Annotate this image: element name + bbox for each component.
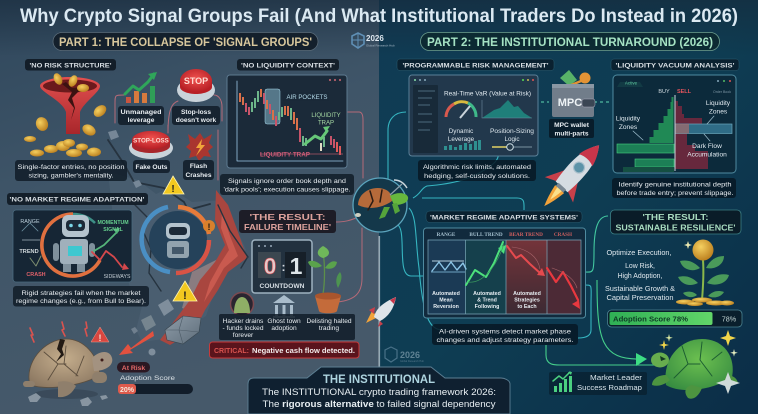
text: failure timeline outcomes: forever <box>233 332 254 339</box>
panel: regime adaptive chart <box>424 228 586 318</box>
panel: regime adaptive chart: Automated <box>432 291 460 297</box>
label: at risk <box>117 362 150 372</box>
panel: market regime robot: SIDEWAYS <box>104 274 131 280</box>
panel: market regime robot: MOMENTUM <box>97 220 129 226</box>
panel: risk dashboard: Position-Sizing <box>490 128 535 135</box>
text: liquidity description <box>220 174 354 195</box>
panel: market regime robot: RANGE <box>20 219 40 225</box>
rocks: rubble <box>108 130 201 356</box>
logo: 2026 top <box>352 33 395 48</box>
panel: regime adaptive chart: Mean <box>439 298 453 304</box>
icon: MPC wallet with key <box>552 70 595 117</box>
label: liquidity vacuum analysis <box>611 59 739 70</box>
text: adoption score label: Adoption Score <box>120 375 175 382</box>
text: liquidity vacuum description <box>612 178 736 198</box>
label: no market regime adaptation <box>7 193 148 205</box>
panel: liquidity depth chart: Liquidity <box>706 100 731 107</box>
icon: healthy green turtle <box>651 330 740 399</box>
icon: second robot in ring: ! <box>208 222 210 232</box>
panel: regime adaptive chart: Automated <box>513 291 541 297</box>
arrow: to market leader turtle <box>636 353 647 366</box>
slider <box>492 144 532 150</box>
logo: 2026 watermark <box>385 347 425 363</box>
text: market leader roadmap with growth icon: Market Leader <box>590 375 643 382</box>
icon: MPC wallet with key: MPC <box>558 97 582 109</box>
label: no liquidity context: 'NO LIQUIDITY CONTEXT' <box>241 62 335 70</box>
panel: liquidity depth chart: BUY <box>658 89 670 95</box>
candles <box>239 89 341 155</box>
text: risk description: hedging, self-custody solutions. <box>424 173 530 180</box>
icon: growth chart roadmap <box>553 372 572 392</box>
text: resilience benefits: Low Risk, <box>625 263 655 270</box>
panel: regime adaptive chart: Following <box>475 304 499 310</box>
arrow: red down-left <box>119 331 154 355</box>
heading: sustainable resilience <box>610 210 741 234</box>
text: failure timeline outcomes: - funds locked <box>222 325 264 332</box>
text: no risk description <box>15 160 127 181</box>
heading: failure timeline: FAILURE TIMELINE' <box>244 223 331 232</box>
text: flash crashes: Crashes <box>185 172 212 179</box>
icon: rising bars and arrow <box>125 72 157 103</box>
heading: sustainable resilience: SUSTAINABLE RESILIENCE' <box>616 224 736 232</box>
text: stop-loss doesn't work: Stop-loss <box>181 109 211 116</box>
panel: liquidity depth chart <box>613 75 736 173</box>
panel: regime adaptive chart: & Trend <box>477 298 497 304</box>
leverage bars <box>444 140 481 150</box>
panel: regime adaptive chart: Automated <box>473 291 501 297</box>
panel: risk dashboard: Real-Time VaR (Value at Risk) <box>444 90 531 98</box>
text: resilience benefits: Optimize Execution, <box>606 250 672 257</box>
icon: flash crash burst <box>186 133 213 161</box>
icon: bank building <box>273 295 295 318</box>
callout: critical alert: CRITICAL: <box>214 346 249 355</box>
panel: countdown timer <box>252 240 312 293</box>
icon: second robot in ring <box>142 207 215 273</box>
panel: countdown timer: 1 <box>290 253 303 279</box>
text: resilience benefits: High Adoption, <box>618 273 662 280</box>
background: right institutional side <box>379 0 758 414</box>
text: MPC wallet caption: MPC wallet <box>554 122 590 129</box>
icon: small rocket <box>366 297 396 327</box>
text: unmanaged leverage: leverage <box>128 117 155 124</box>
text: regime adaptive description <box>432 324 578 345</box>
panel: risk dashboard: Dynamic <box>449 128 473 135</box>
panel: regime adaptive chart: Strategies <box>514 298 540 304</box>
panel: liquidity depth chart: Liquidity <box>616 116 641 122</box>
text: market leader roadmap with growth icon: Success Roadmap <box>577 385 642 392</box>
panel: liquidity depth chart: Active <box>625 80 638 86</box>
text: MPC wallet caption <box>549 119 594 138</box>
chart: adoption progress 78%: 78% <box>722 314 737 324</box>
chart: candlesticks with air pockets: TRAP <box>318 120 334 126</box>
panel: countdown timer: COUNTDOWN <box>260 283 305 290</box>
VaR area chart <box>482 100 532 118</box>
text: fake outs <box>133 160 170 173</box>
label: no market regime adaptation: 'NO MARKET REGIME ADAPTATION' <box>10 196 145 204</box>
icon: warning triangle upper <box>163 176 184 195</box>
divider: vertical white line <box>378 236 380 368</box>
chart: adoption progress 20% <box>118 384 193 394</box>
text: flash crashes: Flash <box>190 163 207 170</box>
icon: warning triangle upper: ! <box>171 184 175 195</box>
chart: adoption progress 78% <box>608 310 742 327</box>
label: market regime adaptive systems: 'MARKET REGIME ADAPTIVE SYSTEMS' <box>430 214 578 222</box>
panel: liquidity depth chart: Accumulation <box>687 152 727 158</box>
robot figure <box>53 215 95 272</box>
icon: warning triangle lower <box>173 281 197 302</box>
panel: liquidity depth chart: SELL <box>677 89 692 95</box>
text: regime description <box>13 286 149 306</box>
chart: candlesticks with air pockets: LIQUIDITY TRAP <box>260 152 310 158</box>
icon: hacker <box>230 292 254 316</box>
icon: warning triangle lower: ! <box>183 290 187 302</box>
icon: central turtle with pickaxe <box>353 178 408 232</box>
text: stop-loss doesn't work: doesn't work <box>176 117 217 124</box>
text: liquidity vacuum description: Identify genuine institutional depth <box>618 182 732 188</box>
text: failure timeline outcomes: Delisting halted <box>306 318 352 325</box>
central crack: torn divide <box>108 140 248 345</box>
panel: market regime robot: CRASH <box>26 272 46 278</box>
panel: regime adaptive chart: CRASH <box>554 232 572 238</box>
chart: candlesticks with air pockets: LIQUIDITY <box>311 113 341 119</box>
chart: adoption progress 20%: 20% <box>120 387 135 394</box>
label: no risk structure: 'NO RISK STRUCTURE' <box>30 62 112 70</box>
label: at risk: At Risk <box>122 365 145 372</box>
panel: regime adaptive chart: BULL TREND <box>469 232 503 238</box>
text: failure timeline outcomes: Hacker drains <box>223 318 264 325</box>
text: liquidity vacuum description: before trade entry; prevent slippage. <box>616 190 734 197</box>
connectors: right panel links <box>388 102 660 365</box>
icon: stop button: STOP <box>184 76 208 86</box>
text: unmanaged leverage: Unmanaged <box>120 109 162 116</box>
panel: institutional bottom banner: The INSTITUTIONAL crypto trading framework 2026: <box>262 387 496 397</box>
gauge <box>446 102 476 118</box>
text: liquidity description: Signals ignore order book depth and <box>228 178 346 185</box>
text: resilience benefits: Capital Preservation <box>606 295 674 302</box>
heading: sustainable resilience: 'THE RESULT: <box>642 213 708 222</box>
dots: window controls <box>329 79 341 81</box>
panel: risk dashboard: Leverage <box>448 136 475 143</box>
text: resilience benefits: Sustainable Growth & <box>605 286 675 293</box>
icon: stop-loss button <box>129 131 173 159</box>
text: regime adaptive description: changes and adjust strategy parameters. <box>436 337 574 344</box>
text: MPC wallet caption: multi-parts <box>554 130 589 138</box>
label: no liquidity context <box>237 59 339 70</box>
chart: candlesticks with air pockets: AIR POCKETS <box>286 94 328 101</box>
text: liquidity description: 'dark pools'; execution causes slippage. <box>224 186 351 194</box>
label: programmable risk management: 'PROGRAMMABLE RISK MANAGEMENT' <box>402 62 549 70</box>
text: no risk description: sizing, gambler's mentality. <box>28 172 114 180</box>
background: title shading <box>0 0 758 56</box>
icon: rocket <box>530 133 613 219</box>
icon: wilting plant in pot <box>308 246 341 313</box>
text: flash crashes <box>183 160 214 180</box>
logo: 2026 top: Global Research Hub <box>366 44 395 48</box>
buy depth <box>650 97 674 143</box>
panel: market regime robot: TREND <box>19 249 39 255</box>
panel: liquidity depth chart: Order Book <box>713 90 731 94</box>
icon: cracked turtle <box>23 322 112 406</box>
icon: stop-loss button: STOP-LOSS <box>133 138 169 144</box>
heading: part 1: PART 1: THE COLLAPSE OF 'SIGNAL GROUPS' <box>59 35 312 49</box>
panel: regime adaptive chart: BEAR TREND <box>509 232 543 238</box>
panel: institutional bottom banner: The rigorous alternative to failed signal dependency <box>262 399 496 409</box>
buy zones <box>617 144 674 153</box>
panel: liquidity depth chart: Dark Flow <box>692 143 722 150</box>
label: liquidity vacuum analysis: 'LIQUIDITY VACUUM ANALYSIS' <box>616 62 735 70</box>
icon: red warning triangle <box>91 327 109 343</box>
label: market regime adaptive systems <box>426 211 582 222</box>
panel: institutional bottom banner <box>248 367 510 414</box>
icon: red warning triangle: ! <box>98 333 102 343</box>
text: failure timeline outcomes: Ghost town <box>267 318 301 325</box>
panel: countdown timer: : <box>282 260 286 274</box>
callout: critical alert: Negative cash flow detected. <box>252 346 355 355</box>
heading: failure timeline: 'THE RESULT: <box>250 213 326 222</box>
label: programmable risk management <box>397 59 554 70</box>
logo: 2026 watermark: Global Research Hub <box>400 360 425 363</box>
panel: liquidity depth chart: Zones <box>619 124 638 131</box>
text: market leader roadmap with growth icon <box>549 372 647 395</box>
chart: candlesticks with air pockets <box>227 75 347 168</box>
panel: market regime robot: SIGNAL <box>103 227 124 233</box>
text: failure timeline outcomes <box>219 314 355 340</box>
text: risk description <box>418 160 536 181</box>
text: regime description: Rigid strategies fail when the market <box>22 290 141 297</box>
panel: regime adaptive chart: Reversion <box>433 304 459 310</box>
heading: failure timeline <box>239 210 336 233</box>
logo: 2026 watermark: 2026 <box>400 350 420 360</box>
icon: coin plant <box>676 240 734 306</box>
panel: regime adaptive chart: RANGE <box>437 232 456 238</box>
panel: liquidity depth chart: Zones <box>709 108 728 116</box>
panel: risk dashboard <box>409 75 538 156</box>
text: unmanaged leverage <box>118 106 164 125</box>
sell depth <box>675 101 708 169</box>
text: regime adaptive description: AI-driven systems detect market phase <box>439 328 571 336</box>
icon: leaking funnel with coins <box>24 72 109 157</box>
label: no risk structure <box>25 59 116 70</box>
panel: market regime robot <box>13 210 132 282</box>
sidebar <box>413 85 438 153</box>
icon: stop button <box>177 69 215 102</box>
logo: 2026 top: 2026 <box>366 34 384 43</box>
panel: countdown timer: 0 <box>264 253 276 279</box>
panel: regime adaptive chart: to Each <box>517 304 537 310</box>
text: no risk description: Single-factor entries, no position <box>18 164 125 171</box>
panel: risk dashboard: Logic <box>504 136 520 143</box>
text: fake outs: Fake Outs <box>136 164 168 171</box>
callout: critical alert <box>210 342 359 358</box>
chart: adoption progress 78%: Adoption Score 78% <box>613 314 689 324</box>
panel: institutional bottom banner: THE INSTITUTIONAL <box>323 372 435 386</box>
text: stop-loss doesn't work <box>172 106 220 125</box>
text: failure timeline outcomes: adoption <box>271 325 297 332</box>
text: resilience benefits <box>605 250 675 302</box>
text: risk description: Algorithmic risk limits, automated <box>423 164 531 171</box>
heading: part 2: PART 2: THE INSTITUTIONAL TURNAROUND (2026) <box>427 35 713 49</box>
text: failure timeline outcomes: trading <box>319 325 339 332</box>
text: regime description: regime changes (e.g., from Bull to Bear). <box>16 298 146 305</box>
background: left collapse side <box>0 0 379 414</box>
connectors: left panel links <box>115 95 363 302</box>
